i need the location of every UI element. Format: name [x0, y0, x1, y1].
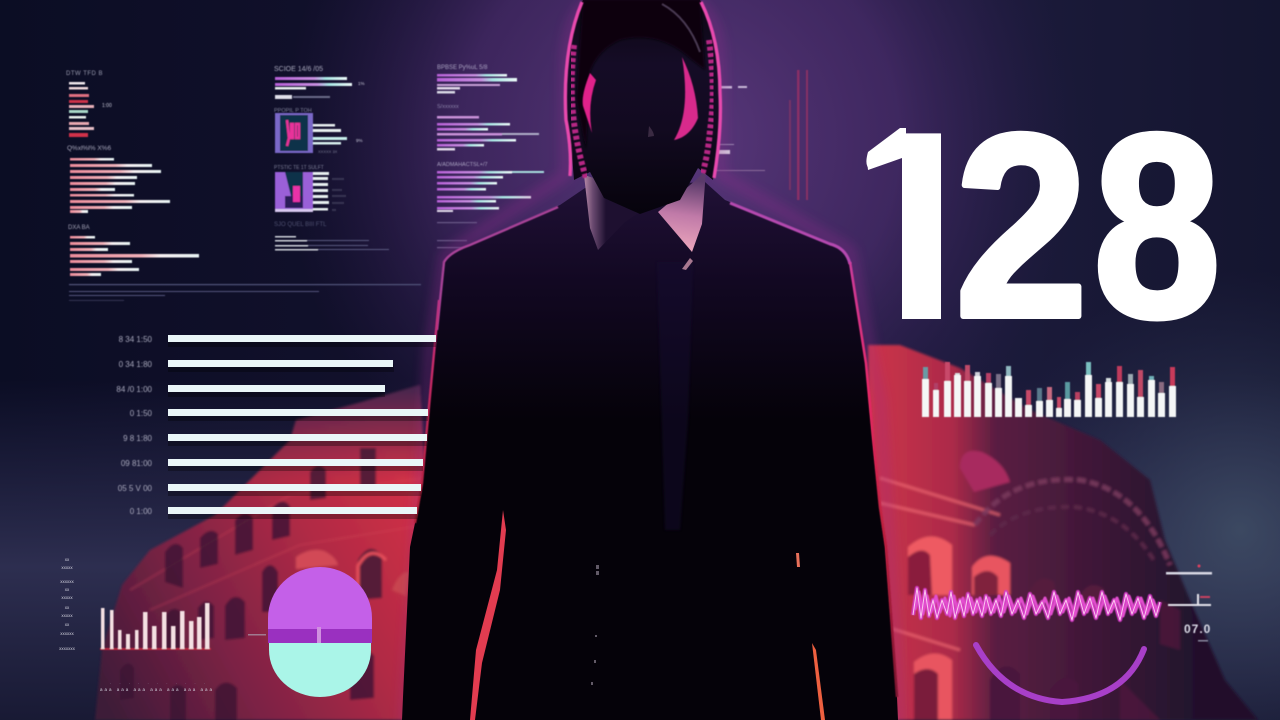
- bars a: [313, 124, 363, 154]
- bars top: [275, 77, 365, 99]
- shirt collar left: [584, 175, 640, 250]
- bars b: [313, 172, 346, 212]
- heading a: BPBSE Py%uL 5/8: [437, 65, 488, 71]
- arch: lit 3: [914, 653, 952, 720]
- arch: lit 1: [908, 536, 952, 595]
- footnote lines: [69, 284, 421, 301]
- small label list: xxxxx: [61, 613, 73, 618]
- pill band: [268, 629, 372, 643]
- chart axis labels: aaa aaa aaa aaa aaa aaa aaa: [100, 687, 212, 692]
- shirt collar right: [658, 170, 706, 252]
- hair sides dark: [576, 0, 705, 150]
- text lines: [275, 236, 389, 250]
- suit rim light left sleeve: [415, 300, 439, 523]
- bar labels: 09 81:00: [121, 459, 153, 468]
- tie shadow: [657, 262, 693, 530]
- big number 128: [866, 128, 1216, 322]
- pill gauge: [248, 567, 372, 697]
- pink bars 2: [70, 158, 170, 213]
- vertical red lines: [789, 70, 808, 200]
- bars: [168, 335, 436, 514]
- small label list: xx: [65, 587, 70, 592]
- bars a: XXXXX 3X: [318, 149, 338, 154]
- horizontal bar chart: [116, 335, 436, 519]
- person glow: [405, 0, 900, 720]
- head and hair: [565, 0, 720, 214]
- bar labels: [116, 335, 153, 516]
- bars b: xxxxxx: [332, 200, 344, 205]
- body wedge left: [470, 510, 506, 720]
- bar labels: 9 8 1:80: [123, 434, 153, 443]
- face highlight left: [583, 73, 596, 133]
- column bodies: [922, 375, 1176, 417]
- suit: [402, 182, 898, 720]
- arch: lit 2: [972, 556, 1010, 595]
- colosseum right: [868, 345, 1258, 720]
- pill purple dome: [268, 567, 372, 632]
- small label list: [59, 557, 76, 651]
- right of head data: [712, 86, 765, 171]
- colosseum left: [95, 385, 440, 720]
- heading 2: Q%xl%l% X%6: [67, 145, 111, 152]
- bar labels: 84 /0 1:00: [116, 385, 153, 394]
- small label list: xx: [65, 622, 70, 627]
- heading 3: DXA BA: [68, 225, 90, 231]
- small label list: xxxxxx: [60, 631, 74, 636]
- pill teal base: [269, 643, 371, 697]
- hair sheen: [662, 4, 700, 52]
- bar labels: 0 1:00: [130, 507, 153, 516]
- hair strands right: [702, 40, 713, 175]
- suit rim light left: [437, 207, 558, 330]
- small label list: xxxxx: [61, 595, 73, 600]
- bar labels: 8 34 1:50: [119, 335, 153, 344]
- thumbnail a: [275, 113, 313, 153]
- thumbnail b: [275, 172, 313, 212]
- bars b: xx: [332, 207, 336, 212]
- subheading a: PPOPIL P TOH: [274, 108, 312, 114]
- bars c: [437, 171, 544, 212]
- digit 2: 2: [955, 81, 1088, 372]
- bars b: xxxxx: [332, 187, 342, 192]
- small label list: xx: [65, 557, 70, 562]
- bars b: xxxxxxx: [332, 193, 346, 198]
- faded lines: [437, 222, 477, 248]
- right small stats: 07.0: [1184, 622, 1211, 636]
- suit rim light right: [730, 203, 850, 264]
- left data column 2: [274, 66, 389, 250]
- digit 1: 1: [843, 81, 989, 372]
- pocket glint: [796, 553, 800, 567]
- hair strands left: [572, 45, 586, 178]
- column caps: [923, 362, 1175, 409]
- subheading c: SJO QUEL BIII FTL: [274, 222, 327, 228]
- mini bars 1: 1:00: [102, 103, 112, 109]
- body wedge right: [812, 643, 825, 720]
- subheading b: PTSTIC TE 1T SULFT: [274, 165, 324, 171]
- nose glint: [648, 126, 654, 137]
- bar labels: 0 34 1:80: [119, 360, 153, 369]
- heading 1: DTW TFD B: [66, 71, 103, 77]
- bars b: [437, 116, 539, 150]
- bars a: [437, 74, 517, 94]
- bars a: 9%: [356, 138, 363, 143]
- left data column 3: [437, 65, 544, 248]
- small label list: xxxxx: [61, 565, 73, 570]
- arc gauge: [976, 645, 1144, 702]
- suit rim light right sleeve: [850, 262, 897, 697]
- waveform: [913, 588, 1160, 620]
- small label list: xxxxxx: [60, 579, 74, 584]
- bar shadows: [168, 339, 436, 519]
- right small stats: [1166, 564, 1212, 642]
- face highlight right: [674, 57, 698, 140]
- heading b: S/xxxxxx: [437, 104, 459, 110]
- left data column 1: [66, 71, 199, 276]
- pink bars 3: [70, 236, 199, 276]
- chart axis labels: . . . . . . . . . . .: [110, 680, 205, 685]
- bars b: xxxxxx: [332, 176, 344, 181]
- mini bars 1: [69, 82, 112, 137]
- hair rim light: [565, 2, 720, 178]
- bars top: 1%: [358, 81, 365, 86]
- person silhouette: [402, 0, 898, 720]
- heading: SCIOE 14/6 /05: [274, 66, 323, 73]
- button glints: [591, 565, 599, 685]
- digit 8: 8: [1093, 80, 1221, 372]
- small label list: xx: [65, 605, 70, 610]
- tie knot glint: [682, 258, 693, 270]
- digit 1 flag: [866, 128, 906, 169]
- column chart right: [922, 362, 1176, 417]
- chart axis labels: [100, 680, 212, 692]
- small label list: xxxxxxx: [59, 646, 76, 651]
- heading c: A/ADMAHACTSL+/7: [437, 162, 488, 168]
- bar labels: 05 5 V 00: [118, 484, 153, 493]
- small column chart: [100, 603, 211, 650]
- bar labels: 0 1:50: [130, 409, 153, 418]
